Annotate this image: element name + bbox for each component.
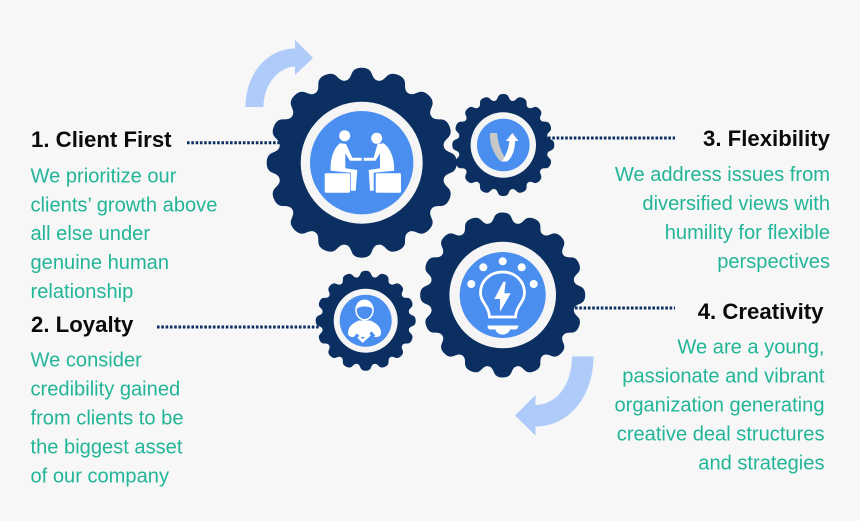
text: creativity description: We are a young, bbox=[677, 336, 824, 358]
heading: flexibility: 3. Flexibility bbox=[703, 126, 831, 151]
gear: flexibility bbox=[452, 94, 554, 196]
text: loyalty description: We consider bbox=[30, 350, 142, 372]
icon: light bulb bbox=[467, 257, 538, 334]
text: creativity description: and strategies bbox=[698, 452, 824, 474]
text: client first description: genuine human bbox=[30, 252, 169, 274]
text: flexibility description: perspectives bbox=[717, 251, 830, 273]
section: 3. Flexibility bbox=[615, 126, 831, 273]
text: creativity description: organization generating bbox=[614, 394, 824, 416]
gear: creativity bbox=[420, 212, 585, 378]
heading: creativity: 4. Creativity bbox=[698, 299, 824, 324]
text: client first description: We prioritize our bbox=[30, 166, 177, 188]
text: client first description: clients’ growth above bbox=[30, 194, 217, 216]
icon: two people at a table bbox=[325, 130, 401, 193]
text: client first description: relationship bbox=[30, 281, 133, 303]
text: creativity description: creative deal structures bbox=[617, 424, 824, 446]
section: 4. Creativity bbox=[614, 299, 825, 474]
heading: loyalty: 2. Loyalty bbox=[31, 312, 134, 337]
gear: loyalty bbox=[316, 271, 416, 371]
text: loyalty description: the biggest asset bbox=[30, 436, 183, 458]
icon: U-turn arrow bbox=[490, 133, 518, 162]
icon: person with check bbox=[348, 300, 381, 343]
text: loyalty description: from clients to be bbox=[30, 408, 184, 430]
text: flexibility description: We address issues from bbox=[615, 164, 830, 186]
gear: client first bbox=[267, 68, 457, 258]
connector: creativity bbox=[575, 306, 675, 310]
section: 2. Loyalty bbox=[30, 312, 184, 488]
connector: client first bbox=[187, 141, 282, 144]
section: 1. Client First bbox=[30, 127, 217, 303]
text: creativity description: passionate and vibrant bbox=[622, 366, 825, 388]
heading: client first: 1. Client First bbox=[31, 127, 172, 152]
text: flexibility description: humility for flexible bbox=[665, 222, 830, 244]
text: client first description: all else under bbox=[30, 223, 150, 245]
arrow: top curved arrow bbox=[246, 40, 313, 107]
arrow: bottom curved arrow bbox=[515, 356, 594, 436]
text: loyalty description: of our company bbox=[30, 466, 169, 488]
connector: loyalty bbox=[157, 326, 320, 328]
connector: flexibility bbox=[548, 136, 675, 140]
text: loyalty description: credibility gained bbox=[30, 378, 180, 400]
text: flexibility description: diversified views with bbox=[642, 193, 830, 215]
